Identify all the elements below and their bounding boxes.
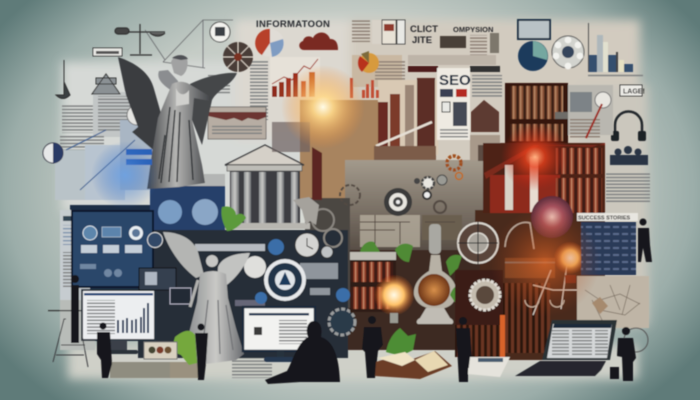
silhouette: man upper right (638, 218, 652, 262)
icon: headphones padlock (611, 112, 646, 141)
monitor icon top right (518, 20, 550, 39)
text column beside SEO (472, 75, 502, 97)
panel: paper details left (55, 20, 268, 200)
temple (225, 145, 310, 229)
icon: flask (414, 224, 456, 324)
leaves top (360, 241, 462, 276)
icon: speech bubble (210, 22, 230, 42)
book shelves left of bulb (350, 252, 396, 312)
panel: dark navy control board (60, 174, 348, 358)
document icons (382, 20, 499, 55)
glow: sun burst (281, 65, 365, 149)
silhouette: man left (97, 322, 112, 378)
rust dark bars top (408, 66, 500, 72)
panel: map sketch (208, 107, 266, 139)
panel: workspace floor (48, 300, 272, 378)
icon: balance scale top (115, 24, 165, 55)
small statue with clock (293, 197, 333, 258)
leaf plant bottom (171, 331, 197, 365)
blue buttons (126, 149, 152, 165)
CLICT heading: CLICT (410, 24, 438, 35)
big blue monitor contents (72, 211, 153, 287)
icon: light bulb (374, 275, 414, 323)
icon: red cloud (299, 32, 338, 50)
red temple and bookcase (483, 143, 605, 213)
icon: dark sunburst disk (223, 42, 253, 72)
icon: gauge circle (458, 222, 498, 264)
map paper (577, 276, 649, 352)
LAGE! label: LAGE! (623, 88, 645, 96)
icon: glowing bulb right (554, 242, 586, 283)
laptop (515, 320, 617, 376)
silhouette: man right (610, 327, 636, 381)
dark control panels (139, 232, 350, 306)
silhouette: man on ladder (53, 275, 88, 367)
JITE heading: JITE (412, 35, 432, 46)
panel: SEO page (437, 68, 471, 140)
icon: small scale left (56, 60, 70, 98)
chart: dark bookcase bars (374, 78, 438, 160)
leaf plant centre (221, 206, 246, 231)
Success stories header: SUCCESS STORIES (578, 216, 630, 222)
gear right of monitor (329, 309, 355, 335)
silhouette: man with tie (362, 316, 383, 378)
scale in centre-right (525, 264, 577, 315)
icon: circular badge (264, 259, 306, 301)
arc gauge sketch (505, 222, 534, 249)
glow: blue highlight (91, 141, 159, 209)
statue: winged figure bottom (163, 232, 250, 365)
icon: gear wheel cluster (552, 36, 584, 69)
feathered paper backdrop (62, 20, 648, 379)
photo tile (144, 342, 177, 359)
icon: pink orb (531, 196, 573, 238)
label box (93, 48, 122, 56)
statue: winged figure top (118, 55, 237, 189)
pie: orange and red (358, 51, 379, 73)
pie: navy and teal (518, 41, 548, 71)
papers on desk (468, 357, 510, 377)
Success stories header (577, 213, 638, 222)
right text block (606, 172, 650, 202)
small red bars (350, 78, 379, 98)
SEO heading: SEO (439, 72, 471, 89)
silhouette: man with briefcase (456, 317, 476, 382)
collage artwork (43, 19, 652, 384)
OMPYSION heading: OMPYSION (453, 25, 493, 34)
open book (375, 351, 452, 379)
icon: audience group (610, 146, 648, 165)
shelf behind gauge (455, 270, 505, 360)
chart: INFORMATOON heading: INFORMATOON (256, 19, 330, 30)
grid panel (581, 222, 636, 275)
panel: centre brown backdrop (305, 160, 605, 360)
data sheet with plug (568, 85, 613, 138)
gears cluster (414, 156, 462, 199)
monitor with bar chart (82, 290, 155, 354)
chart: rising red bars (270, 57, 320, 98)
icon: half moon globe (43, 143, 63, 163)
small gears (312, 185, 446, 247)
icon: target (384, 188, 412, 216)
monitor with document (243, 307, 315, 362)
glow: red temple (501, 123, 569, 191)
leaves below bulb (386, 328, 416, 356)
brown icon panel (470, 100, 500, 161)
LAGE! label (620, 85, 645, 96)
chart: navy bars top right (588, 23, 643, 78)
silhouette: man centre (195, 324, 208, 380)
silhouette: seated man (265, 321, 340, 384)
chart: red and blue pie (255, 29, 284, 57)
bookcase top (505, 83, 577, 143)
icon: small building (92, 74, 120, 94)
panel: warm paper details right (300, 20, 496, 205)
leaves right of flask (450, 281, 472, 307)
glow: orange wall halo (490, 207, 600, 317)
icon: magnifier globe (127, 105, 147, 125)
red book stack (272, 122, 322, 200)
